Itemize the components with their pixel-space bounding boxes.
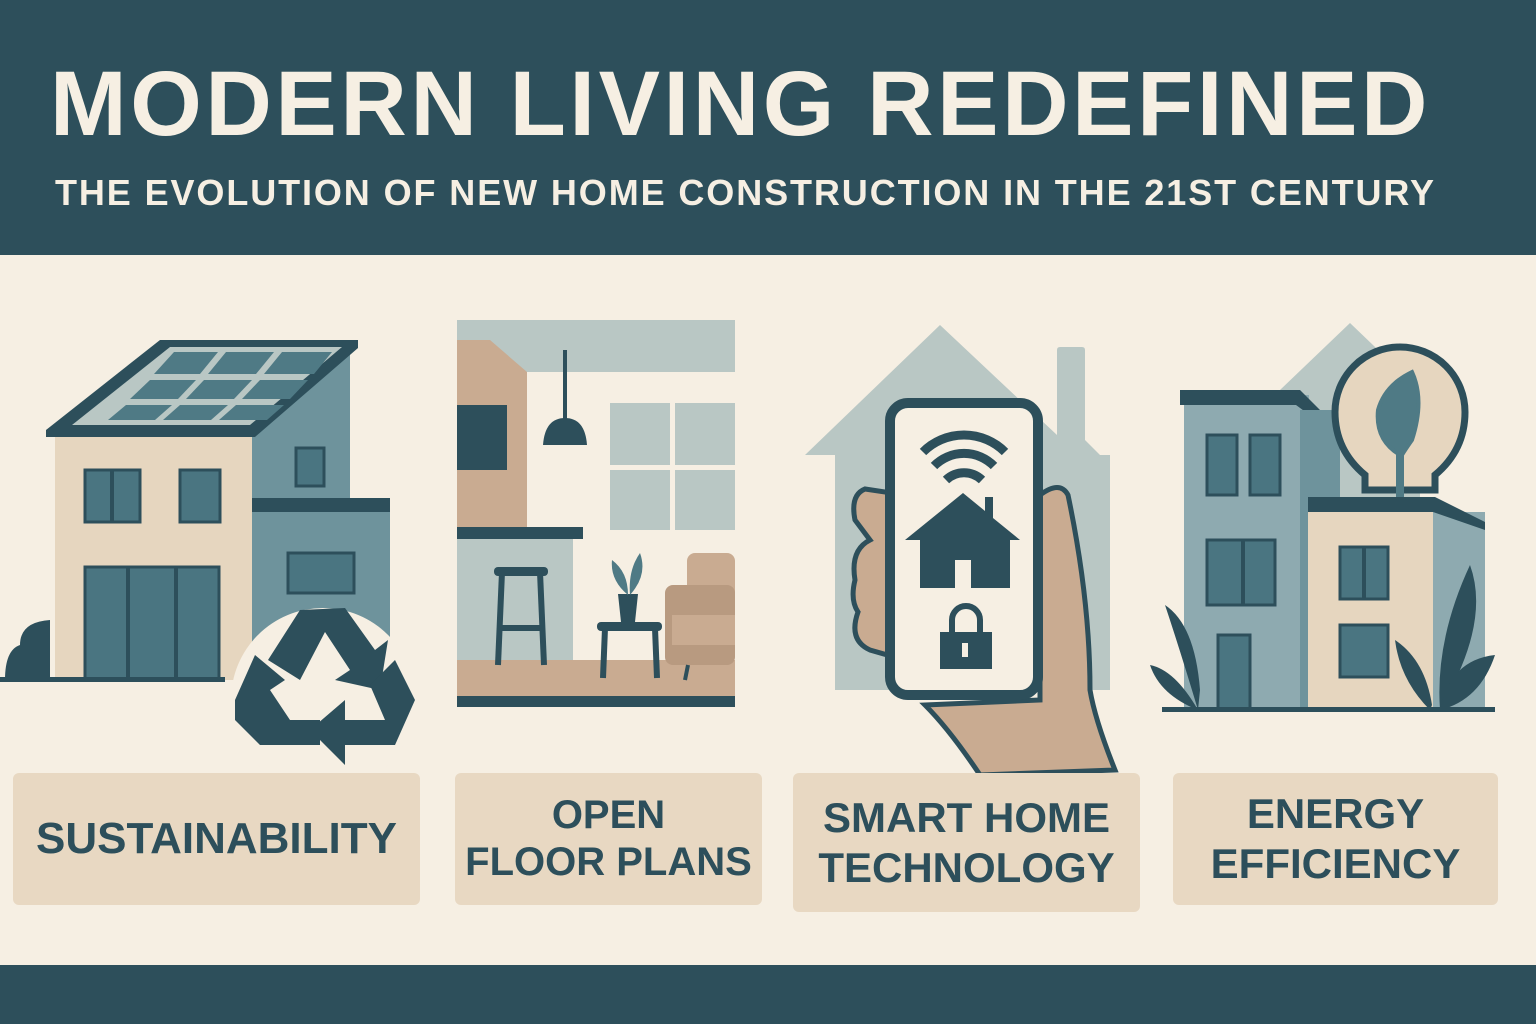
icon: smart home phone bbox=[805, 325, 1115, 775]
label: sustainability bbox=[13, 773, 420, 905]
label: energy efficiency bbox=[1173, 773, 1498, 905]
icon: sustainable house bbox=[0, 340, 390, 682]
icon: recycle bbox=[231, 608, 415, 792]
label: open floor plans: FLOOR PLANS bbox=[465, 840, 752, 884]
label: smart home technology: TECHNOLOGY bbox=[818, 844, 1115, 890]
icon: open floor plan bbox=[457, 320, 735, 707]
subtitle: THE EVOLUTION OF NEW HOME CONSTRUCTION IN THE 21ST CENTURY bbox=[55, 172, 1436, 213]
label: energy efficiency: ENERGY bbox=[1247, 790, 1424, 837]
label: smart home technology: SMART HOME bbox=[823, 794, 1110, 841]
title: MODERN LIVING REDEFINED bbox=[50, 53, 1431, 155]
footer band bbox=[0, 965, 1536, 1024]
label: sustainability: SUSTAINABILITY bbox=[36, 814, 397, 863]
label: smart home technology bbox=[793, 773, 1140, 912]
label: open floor plans: OPEN bbox=[552, 793, 665, 837]
label: open floor plans bbox=[455, 773, 762, 905]
label: energy efficiency: EFFICIENCY bbox=[1211, 840, 1460, 887]
icon: energy efficient building bbox=[1150, 323, 1495, 712]
header band bbox=[0, 0, 1536, 255]
